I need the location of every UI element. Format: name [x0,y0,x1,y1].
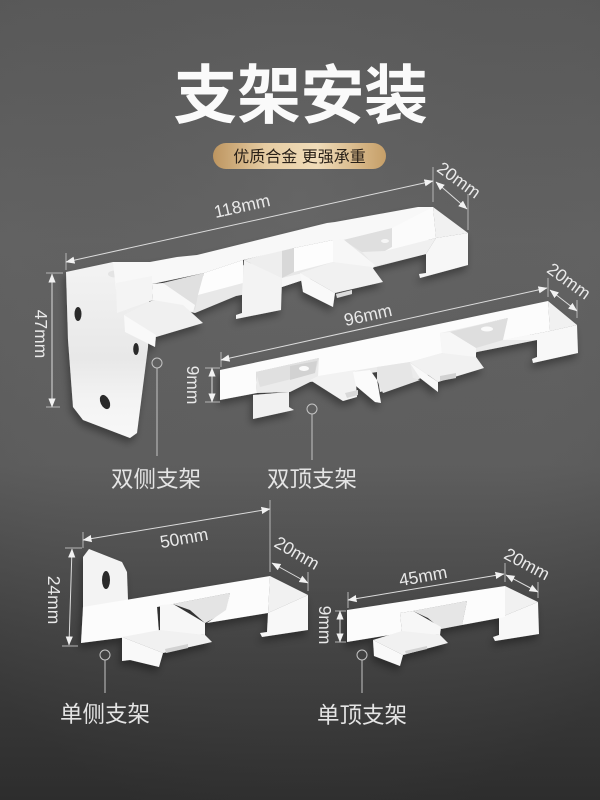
centre box [377,362,420,393]
right end [260,576,308,637]
mounting plate [66,262,150,438]
clip [373,611,448,666]
badge: alloy strength: 优质合金 更强承重 [233,148,366,166]
dimension: 20mm depth: 20mm [433,158,485,202]
callout: single top bracket: 单顶支架 [317,703,407,728]
rail top strip [113,207,433,290]
double side bracket product [66,207,468,438]
dimension: 47mm: 47mm [31,310,51,358]
third face [294,240,333,272]
back wall of rail [150,215,433,313]
dimension: 96mm [221,278,548,367]
dimension: 20mm depth: 20mm [501,544,553,584]
left face [116,276,153,313]
double side bracket dimensions [31,158,485,407]
second face [198,260,243,295]
right end [493,586,539,641]
left opening [256,358,319,387]
right end [419,207,468,278]
dimension: 47mm [31,273,63,407]
opening interior [413,601,467,629]
dimension: 9mm: 9mm [183,366,203,404]
dimension: 96mm: 96mm [342,300,394,330]
single top bracket product [347,586,539,666]
dimension: 118mm: 118mm [212,190,272,222]
title: 支架安装 [174,60,428,132]
rail face [81,576,270,643]
rail face [347,586,505,642]
single side bracket dimensions [44,500,323,646]
mounting plate [83,549,128,610]
dimension: 118mm [66,167,433,270]
dimension: 24mm [44,548,82,646]
single side bracket product [81,549,308,667]
dimension: 50mm: 50mm [158,524,210,552]
callout: single side bracket: 单侧支架 [60,702,150,727]
callout: double top bracket [267,404,357,492]
dimension: 9mm: 9mm [315,606,335,644]
right clip [410,332,484,392]
callout: double side bracket: 双侧支架 [111,467,201,492]
dimension: 20mm depth: 20mm [543,259,595,303]
right opening [450,318,508,348]
rail face [220,301,550,400]
back wall of rail [256,318,537,393]
opening interior [173,593,230,623]
dimension: 45mm: 45mm [397,562,449,590]
dimension: 45mm [348,562,505,608]
left clip [124,283,203,347]
badge: alloy strength [213,143,386,169]
right end [503,301,578,363]
centre clip [310,370,381,403]
callout: double top bracket: 双顶支架 [267,467,357,492]
dimension: 24mm: 24mm [44,576,64,624]
double top bracket dimensions [183,259,595,404]
clip [122,604,212,667]
right face [385,207,436,251]
single top bracket dimensions [315,544,553,644]
dimension: 9mm [315,606,346,644]
dimension: 9mm [183,366,220,404]
double top bracket product [220,301,578,419]
opening shades [163,273,204,310]
callout: single side bracket [60,650,150,727]
left leg [253,392,294,419]
callout: single top bracket [317,650,407,728]
dimension: 50mm [83,500,270,572]
right clip [300,239,383,307]
callout: double side bracket [111,358,201,492]
dimension: 20mm depth [433,158,485,230]
dimension: 20mm depth: 20mm [271,532,323,574]
middle leg [236,260,282,319]
